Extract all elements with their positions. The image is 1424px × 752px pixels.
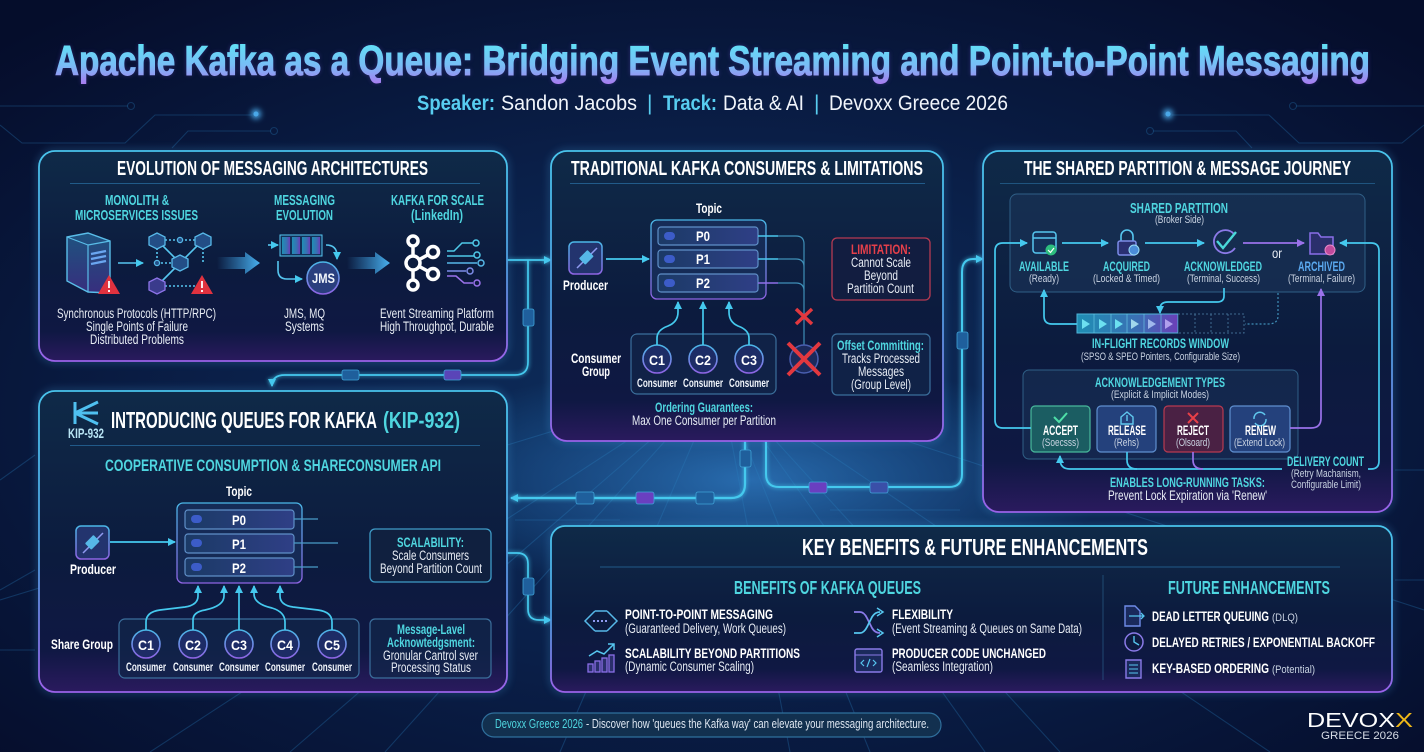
arrows: consumers to topic	[657, 302, 749, 345]
button: renew: (Extend Lock)	[1234, 437, 1285, 449]
logo: devoxx greece: DEVOX	[1307, 710, 1395, 732]
text block: delivery count: DELIVERY COUNT	[1287, 453, 1364, 469]
text block: monolith issues	[57, 306, 216, 347]
text block: window: IN-FLIGHT RECORDS WINDOW	[1092, 335, 1230, 351]
share group box	[119, 619, 359, 678]
button: reject	[1164, 406, 1223, 452]
button: reject: REJECT	[1177, 422, 1209, 438]
text block: event streaming: High Throughpot, Durable	[380, 319, 494, 334]
heading: TRADITIONAL KAFKA CONSUMERS & LIMITATIONS	[571, 158, 923, 180]
button: accept: (Soecsss)	[1042, 437, 1079, 449]
text block: long-running tasks: ENABLES LONG-RUNNING TASKS:	[1110, 474, 1265, 490]
topic with partitions: P1	[232, 536, 246, 552]
subheading: kafka for scale: KAFKA FOR SCALE	[391, 192, 484, 209]
icon: microservices network with warning	[149, 233, 213, 294]
consumer group box	[631, 334, 776, 394]
future: key-based ordering: KEY-BASED ORDERING	[1152, 660, 1269, 676]
subheading: monolith	[75, 192, 198, 224]
callout: offset committing	[832, 334, 930, 395]
heading: KEY BENEFITS & FUTURE ENHANCEMENTS	[802, 534, 1148, 560]
text block: event streaming	[380, 306, 494, 334]
callout: limitation: Beyond	[864, 268, 898, 283]
callout: offset committing: (Group Level)	[851, 377, 911, 392]
benefit: producer code: PRODUCER CODE UNCHANGED	[892, 645, 1046, 661]
share group box: Consumer	[173, 660, 213, 674]
subtitle: speaker and track: Track:	[663, 92, 717, 115]
subtitle: speaker and track	[417, 92, 1008, 115]
acknowledgement types box: ACKNOWLEDGEMENT TYPES	[1095, 374, 1225, 390]
callout: scalability: Beyond Partition Count	[380, 561, 482, 576]
benefit: point-to-point: POINT-TO-POINT MESSAGING	[625, 606, 773, 622]
text block: ordering guarantees: Max One Consumer per Partition	[632, 413, 776, 428]
future: delayed retries	[1125, 633, 1375, 651]
icon: KIP-932 logo	[68, 402, 104, 441]
text block: monolith issues: Synchronous Protocols (HTTP/RPC)	[57, 306, 216, 321]
heading: INTRODUCING QUEUES FOR KAFKA	[111, 407, 377, 433]
callout: limitation: LIMITATION:	[851, 241, 911, 257]
footer banner	[482, 713, 941, 737]
panel: traditional kafka consumers	[551, 151, 943, 441]
callout: message-level acknowledgement: Processing Status	[391, 660, 471, 675]
logo: devoxx greece: GREECE 2026	[1321, 730, 1399, 742]
state: acquired: (Locked & Timed)	[1093, 273, 1160, 285]
text block: long-running tasks	[1108, 474, 1267, 503]
share group box: C4	[277, 637, 293, 653]
label: producer: Producer	[70, 561, 116, 577]
benefit: producer code	[855, 645, 1046, 674]
state: acquired	[1093, 230, 1160, 285]
label: producer: Producer	[563, 277, 608, 293]
subtitle: speaker and track: Speaker:	[417, 92, 495, 115]
icon: producer	[76, 526, 109, 559]
callout: scalability	[370, 529, 491, 582]
subheading: monolith: MONOLITH &	[105, 192, 169, 209]
panel: introducing queues for kafka	[39, 391, 507, 692]
callout: message-level acknowledgement: Gronular Cantrol sver	[383, 648, 478, 663]
acknowledgement types box: (Explicit & Implicit Modes)	[1111, 389, 1209, 401]
consumer group box: Consumer	[729, 376, 769, 390]
callout: message-level acknowledgement: Acknowtedgsment:	[387, 634, 475, 650]
partition lines to blocked consumer	[758, 236, 804, 345]
subheading: COOPERATIVE CONSUMPTION & SHARECONSUMER API	[105, 456, 441, 475]
icon: blocked consumer	[788, 309, 820, 375]
consumer group box: Consumer	[637, 376, 677, 390]
text block: delivery count	[1287, 453, 1364, 491]
benefit: producer code: (Seamless Integration)	[892, 659, 993, 674]
share group box: C1	[138, 637, 154, 653]
button: renew: RENEW	[1245, 422, 1276, 438]
text block: JMS systems: JMS, MQ	[284, 306, 325, 321]
benefit: scalability: SCALABILITY BEYOND PARTITIONS	[625, 645, 800, 661]
text block: delivery count: Configurable Limit)	[1291, 479, 1361, 491]
icon: kafka logo	[406, 236, 484, 290]
label: share group: Share Group	[51, 636, 113, 652]
button: accept	[1031, 406, 1090, 452]
text block: JMS systems: Systems	[285, 319, 324, 334]
button: release	[1097, 406, 1156, 452]
benefit: flexibility: FLEXIBILITY	[892, 606, 953, 622]
subtitle: speaker and track: |	[814, 92, 819, 115]
icon: KIP-932 logo: KIP-932	[68, 425, 104, 441]
share group box: C5	[324, 637, 340, 653]
future: dead letter queuing: DEAD LETTER QUEUING	[1152, 608, 1269, 624]
callout: offset committing: Messages	[858, 364, 904, 379]
share group box: Consumer	[219, 660, 259, 674]
benefit: point-to-point	[585, 606, 786, 636]
logo: devoxx greece: X	[1395, 710, 1413, 732]
arrow	[217, 252, 260, 274]
footer banner: - Discover how 'queues the Kafka way' can elevate your messaging architecture.	[586, 717, 929, 731]
button: accept: ACCEPT	[1043, 422, 1078, 438]
topic with partitions	[651, 220, 766, 299]
state arrows	[1062, 242, 1304, 244]
text block: monolith issues: Single Points of Failure	[86, 319, 188, 334]
label: or: or	[1272, 246, 1282, 261]
subheading: kafka for scale: (LinkedIn)	[411, 207, 463, 224]
topic with partitions: P0	[232, 512, 246, 528]
panel: shared partition and message journey	[983, 151, 1392, 512]
callout: message-level acknowledgement: Message-Lavel	[397, 621, 465, 637]
state: acquired: ACQUIRED	[1103, 258, 1150, 274]
state: available	[1019, 232, 1069, 285]
subtitle: speaker and track: Devoxx Greece 2026	[829, 92, 1008, 115]
icon: server with warning	[67, 233, 120, 294]
topic with partitions: P0	[696, 228, 710, 244]
share group box: Consumer	[265, 660, 305, 674]
subheading: kafka for scale	[391, 192, 484, 224]
state: archived: (Terminal, Failure)	[1288, 273, 1355, 285]
callout: scalability: SCALABILITY:	[397, 534, 464, 550]
callout: scalability: Scale Consumers	[392, 548, 469, 563]
label: consumer group: Consumer	[571, 350, 621, 366]
state: acknowledged: (Terminal, Success)	[1187, 273, 1260, 285]
subheading: benefits: BENEFITS OF KAFKA QUEUES	[734, 578, 921, 598]
text block: ordering guarantees	[632, 399, 776, 428]
window arrows	[1044, 288, 1278, 324]
label: consumer group	[571, 350, 621, 379]
label: topic: Topic	[696, 200, 722, 216]
benefit: scalability	[588, 644, 800, 674]
subheading: messaging evolution: MESSAGING	[274, 192, 335, 209]
text block: window	[1081, 335, 1240, 363]
heading: EVOLUTION OF MESSAGING ARCHITECTURES	[117, 158, 428, 180]
heading: (KIP-932)	[383, 407, 460, 433]
panel: evolution of messaging architectures	[39, 151, 507, 361]
subheading: messaging evolution: EVOLUTION	[276, 207, 333, 224]
connectors between panels	[272, 259, 983, 620]
subheading: future enhancements: FUTURE ENHANCEMENTS	[1168, 578, 1330, 598]
button: release: RELEASE	[1108, 422, 1146, 438]
share group box: C3	[231, 637, 247, 653]
callout: limitation: Partition Count	[847, 281, 914, 296]
shared partition box	[1010, 194, 1365, 292]
text block: delivery count: (Retry Machanism,	[1291, 468, 1361, 480]
state: archived	[1288, 233, 1355, 285]
text block: long-running tasks: Prevent Lock Expiration via 'Renew'	[1108, 488, 1267, 503]
acknowledgement types box	[1023, 370, 1298, 459]
callout: limitation	[832, 238, 930, 300]
state: available: (Ready)	[1029, 273, 1059, 285]
icon: producer	[569, 242, 602, 274]
label: consumer group: Group	[582, 363, 610, 379]
topic with partitions: P2	[696, 275, 710, 291]
text block: monolith issues: Distributed Problems	[90, 332, 184, 347]
subheading: monolith: MICROSERVICES ISSUES	[75, 207, 198, 224]
text block: window: (SPSO & SPEO Pointers, Configurable Size)	[1081, 351, 1240, 363]
state: archived: ARCHIVED	[1298, 258, 1345, 274]
benefit: flexibility	[854, 606, 1082, 637]
state: acknowledged: ACKNOWLEDGED	[1184, 258, 1262, 274]
benefit: flexibility: (Event Streaming & Queues on Same Data)	[892, 621, 1082, 636]
subtitle: speaker and track: Sandon Jacobs	[501, 92, 637, 115]
arrows: consumers to topic	[146, 586, 332, 630]
callout: message-level acknowledgement	[370, 619, 491, 678]
button: renew	[1230, 406, 1290, 452]
consumer group box: C1	[649, 352, 665, 368]
consumer group box: Consumer	[683, 376, 723, 390]
state: available: AVAILABLE	[1019, 258, 1069, 274]
future: key-based ordering: (Potential)	[1272, 664, 1315, 676]
footer banner: Devoxx Greece 2026	[495, 717, 583, 731]
callout: offset committing: Offset Committing:	[837, 337, 924, 353]
benefit: scalability: (Dynamic Consumer Scaling)	[625, 659, 754, 674]
future: dead letter queuing: (DLQ)	[1272, 612, 1298, 624]
subtitle: speaker and track: Data & AI	[723, 92, 804, 115]
icon: queue and JMS: JMS	[312, 271, 335, 286]
topic with partitions: P1	[696, 251, 710, 267]
arrow	[347, 252, 390, 274]
button: release: (Rehs)	[1114, 437, 1139, 449]
state: acknowledged	[1184, 230, 1262, 285]
text block: ordering guarantees: Ordering Guarantees:	[655, 399, 753, 415]
text block: JMS systems	[284, 306, 325, 334]
share group box: C2	[185, 637, 201, 653]
flow loops	[995, 243, 1379, 469]
button: reject: (Olsoard)	[1176, 437, 1210, 449]
consumer group box: C3	[741, 352, 757, 368]
panel: key benefits and future enhancements	[551, 526, 1392, 692]
callout: offset committing: Tracks Processed	[842, 351, 920, 366]
topic with partitions	[177, 503, 338, 583]
benefit: point-to-point: (Guaranteed Delivery, Work Queues)	[625, 621, 786, 636]
shared partition box: SHARED PARTITION	[1130, 200, 1228, 217]
text block: event streaming: Event Streaming Platform	[380, 306, 494, 321]
consumer group box: C2	[695, 352, 711, 368]
label: topic: Topic	[226, 483, 252, 499]
shared partition box: (Broker Side)	[1155, 214, 1204, 226]
share group box: Consumer	[312, 660, 352, 674]
logo: devoxx greece	[1307, 710, 1413, 742]
icon: queue and JMS	[268, 235, 339, 294]
topic with partitions: P2	[232, 560, 246, 576]
in-flight window	[1077, 314, 1244, 333]
subtitle: speaker and track: |	[647, 92, 652, 115]
callout: limitation: Cannot Scale	[851, 255, 911, 270]
future: dead letter queuing	[1125, 606, 1298, 626]
share group box: Consumer	[126, 660, 166, 674]
subheading: messaging evolution	[274, 192, 335, 224]
